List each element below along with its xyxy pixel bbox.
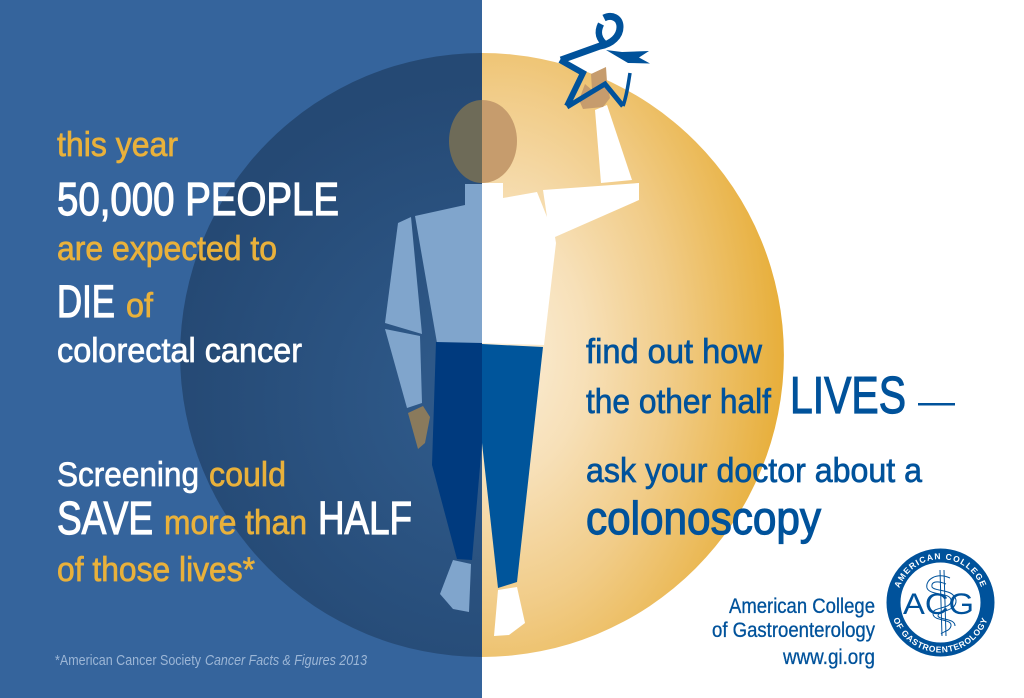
- website: www.gi.org: [782, 646, 875, 669]
- right trouser leg: [482, 344, 543, 588]
- figure: half-blue half-white person: [385, 67, 639, 636]
- seal bottom text: OF GASTROENTEROLOGY: [894, 617, 987, 652]
- Screening: Screening: [57, 456, 199, 494]
- circle left half: [180, 53, 482, 657]
- text block: call to action: [586, 333, 955, 544]
- of those lives: of those lives*: [57, 551, 255, 589]
- American College: American College: [729, 595, 875, 618]
- text block: screening: [57, 456, 412, 589]
- colorectal cancer: colorectal cancer: [57, 332, 302, 370]
- left forearm: [385, 329, 422, 408]
- of: of: [126, 287, 154, 325]
- ask your doctor: ask your doctor about a: [586, 452, 922, 490]
- right shoe: [494, 587, 525, 636]
- left shoe: [440, 560, 471, 612]
- circle: split dark blue and gold: [180, 53, 784, 657]
- head: [449, 100, 517, 183]
- this year: this year: [57, 126, 178, 164]
- seal top text: AMERICAN COLLEGE: [894, 553, 986, 588]
- HALF: HALF: [318, 492, 412, 544]
- right forearm: [595, 105, 632, 183]
- left hand: [408, 406, 430, 449]
- seal ring: [894, 556, 988, 650]
- raised hand: [579, 67, 610, 109]
- left trouser leg: [432, 342, 482, 560]
- right torso and raised upper arm: [482, 183, 639, 345]
- footnote source: *American Cancer Society: [55, 652, 201, 669]
- footnote title: Cancer Facts & Figures 2013: [205, 652, 368, 669]
- dash: [918, 403, 955, 406]
- more than: more than: [164, 504, 307, 542]
- staff and snake: [927, 570, 956, 636]
- DIE: DIE: [57, 276, 115, 327]
- SAVE: SAVE: [57, 492, 153, 544]
- circle right half: [482, 53, 784, 657]
- left torso: [415, 184, 482, 343]
- 50,000 PEOPLE: 50,000 PEOPLE: [57, 173, 339, 225]
- footnote: [55, 652, 368, 669]
- find out how: find out how: [586, 333, 762, 371]
- panel: blue left background: [0, 0, 482, 698]
- logo: ACG seal: [886, 548, 994, 656]
- left upper arm: [385, 217, 422, 334]
- ACG letters: ACG: [903, 588, 974, 621]
- the other half: the other half: [586, 383, 772, 421]
- are expected to: are expected to: [57, 230, 277, 268]
- LIVES: LIVES: [790, 367, 906, 425]
- organisation name: [712, 595, 875, 669]
- of Gastroenterology: of Gastroenterology: [712, 619, 875, 642]
- icon: ribbon star: [560, 16, 650, 107]
- text block: left headline: [57, 126, 339, 370]
- could: could: [209, 456, 286, 494]
- colonoscopy: colonoscopy: [586, 492, 821, 544]
